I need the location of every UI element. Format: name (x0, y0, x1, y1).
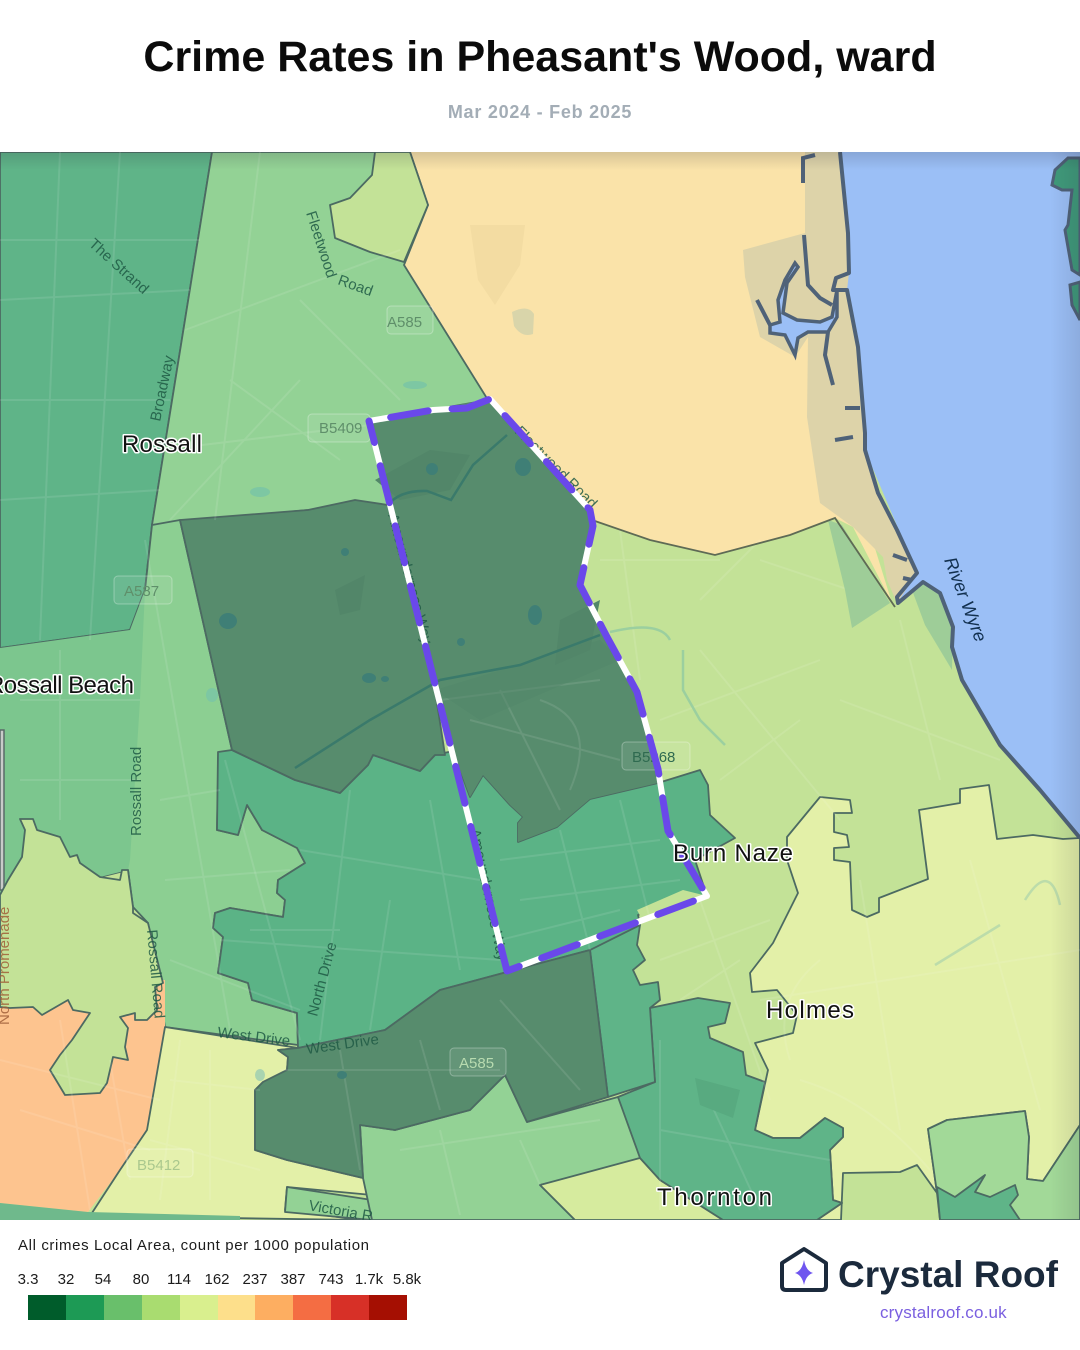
place labels: Thornton (657, 1184, 772, 1211)
region: central mid green (213, 750, 735, 1048)
region: Rossall light green (152, 152, 488, 525)
road shields: B5409 (319, 420, 362, 437)
legend tick labels: 237 (242, 1271, 268, 1288)
region: south-east mid green (618, 998, 843, 1220)
base land: yellow-green area (0, 152, 1080, 1220)
legend tick labels: 743 (318, 1271, 344, 1288)
choropleth map (0, 152, 1080, 1220)
region: sand-coloured low crime area (404, 152, 892, 603)
road labels: West Drive (305, 1031, 380, 1058)
region: Rossall Beach mid light green (0, 520, 305, 1045)
logo wordmark: Crystal Roof (838, 1254, 1058, 1295)
place labels (0, 431, 854, 1211)
legend tick labels: 114 (167, 1271, 191, 1288)
legend tick labels: 54 (95, 1271, 111, 1288)
region: south-west corner strip (0, 1203, 240, 1220)
legend tick labels (18, 1271, 422, 1288)
region: west yellow-green (0, 819, 163, 1095)
road shields: B5268 (632, 749, 675, 766)
road labels: Broadway (147, 354, 178, 423)
legend tick labels: 5.8k (393, 1271, 421, 1288)
legend tick labels: 387 (280, 1271, 306, 1288)
road labels: Amounderness Way (466, 827, 511, 963)
region: dark green south (255, 950, 608, 1178)
title: Crime Rates in Pheasant's Wood, ward (143, 33, 937, 81)
legend tick labels: 3.3 (18, 1271, 38, 1288)
region: mid green band south of ward (590, 925, 660, 1097)
road shields: A587 (124, 583, 159, 600)
region: south-east mid green patch (937, 1175, 1020, 1220)
region: marsh (743, 152, 917, 603)
region: Victoria Road light green strip (285, 1187, 372, 1220)
road shields: A585 (459, 1055, 494, 1072)
road labels: Road (336, 272, 375, 300)
road shields: B5412 (137, 1157, 180, 1174)
road labels: Rossall Road (143, 929, 168, 1019)
streets and park texture (0, 152, 1080, 1215)
region: Pheasant's Wood ward dark green (369, 399, 658, 842)
region: south-east light green (928, 1111, 1080, 1220)
legend tick labels: 32 (58, 1271, 74, 1288)
region: yellow-green notch at ward corner (637, 890, 707, 925)
road labels: Amounderness Way (384, 512, 435, 646)
road labels: River Wyre (940, 554, 991, 645)
left edge grey strip (0, 730, 4, 890)
region: small yellow-green north (330, 152, 428, 262)
logo: Crystal Roof (780, 1247, 1058, 1322)
region: east pale yellow (750, 785, 1080, 1220)
road labels: North Drive (304, 940, 340, 1018)
place labels: Burn Naze (673, 840, 793, 867)
legend tick labels: 80 (133, 1271, 149, 1288)
region: Thornton pale yellow (540, 1158, 723, 1220)
icon: house with purple star (780, 1247, 828, 1292)
region: dark green west of ward (180, 500, 445, 793)
road labels: West Drive (217, 1024, 291, 1050)
road labels: The Strand (85, 235, 152, 298)
place labels: Holmes (766, 997, 854, 1024)
legend tick labels: 162 (204, 1271, 230, 1288)
subtitle: date range: Mar 2024 - Feb 2025 (448, 102, 632, 122)
water: River Wyre (838, 152, 1080, 838)
map edge shading (0, 152, 1080, 1220)
legend tick labels: 1.7k (355, 1271, 383, 1288)
road shields: A585 (387, 314, 422, 331)
ward boundary: white line with purple dashes (369, 399, 707, 971)
sand area darker patches (470, 225, 534, 335)
website url: crystalroof.co.uk (880, 1303, 1007, 1322)
road shields (114, 306, 690, 1177)
water patches (206, 381, 542, 1081)
park patches (335, 450, 740, 1118)
road labels: Rossall Road (128, 747, 145, 836)
island: top right land (1052, 158, 1080, 320)
shoreline and tidal inlet (592, 152, 1080, 838)
road labels: Fleetwood Road (511, 423, 600, 512)
place labels: Rossall (122, 431, 202, 458)
legend colour bar (28, 1295, 407, 1320)
region: north-west mid green (0, 152, 212, 648)
region: south light green (360, 1075, 645, 1220)
region: orange high crime (0, 980, 165, 1212)
road labels: Fleetwood (302, 209, 340, 280)
region: south-west pale yellow (90, 1027, 372, 1220)
creeks (295, 435, 1060, 965)
legend title: All crimes Local Area, count per 1000 population (18, 1237, 370, 1254)
road labels (0, 209, 991, 1225)
legend: crime rate colour scale (18, 1237, 422, 1320)
region: western mid green strip (0, 590, 145, 895)
